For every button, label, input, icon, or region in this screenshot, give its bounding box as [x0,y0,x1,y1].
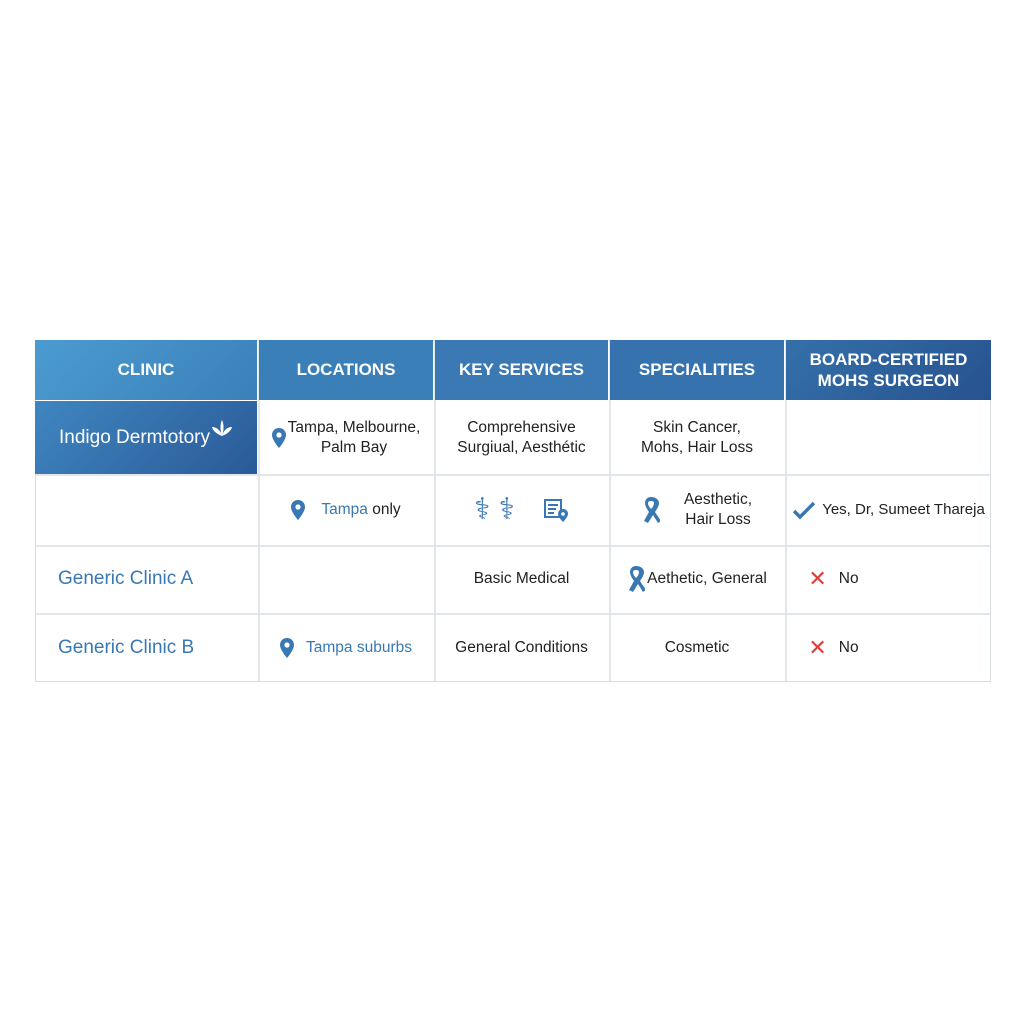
clinic name cell [35,401,257,474]
header: mohs [786,340,991,400]
row 3 [58,566,859,592]
locations [291,500,401,520]
specialities: Aesthetic, [684,490,752,508]
specialities: Skin Cancer, [653,418,741,436]
table grid [35,340,991,682]
mohs no: No [839,638,859,656]
header: locations [259,340,433,400]
header row [35,340,991,400]
locations: Tampa suburbs [306,638,412,656]
header: key services [435,340,608,400]
locations [272,418,420,456]
services: Surgiual, Aesthétic [457,438,586,456]
locations: only [372,500,401,518]
header: specialities: SPECIALITIES [639,360,755,379]
mohs no [808,566,859,591]
clinic A: Generic Clinic A [58,568,193,589]
services: Basic Medical [474,570,569,587]
locations: Palm Bay [321,438,387,456]
services: Comprehensive [467,418,576,436]
header: mohs: BOARD-CERTIFIED [810,350,967,369]
header: locations: LOCATIONS [297,360,395,379]
mohs no [808,634,859,660]
mohs no: ✕ [808,566,827,591]
header: key services: KEY SERVICES [459,360,584,379]
clinic name cell: Indigo Dermtotory [59,426,210,448]
locations: Tampa, Melbourne, [288,418,420,436]
row 2 [291,490,985,528]
mohs no: No [839,570,859,587]
clinic B: Generic Clinic B [58,636,194,658]
row: Indigo [35,401,753,474]
header: clinic: CLINIC [118,360,174,379]
service icons: ⚕︎ ⚕︎ [474,492,515,526]
services [457,418,586,456]
header: clinic [35,340,257,400]
specialities: Cosmetic [665,638,729,656]
locations: Tampa [321,500,368,518]
locations [280,638,412,658]
specialities: Mohs, Hair Loss [641,438,753,456]
mohs yes: Yes, Dr, Sumeet Thareja [822,500,985,518]
specialities: Aethetic, General [647,570,767,587]
mohs no: ✕ [808,634,827,660]
services: General Conditions [455,638,588,656]
service icons [474,492,568,526]
specialities: Hair Loss [685,510,751,528]
row 4 [58,634,859,660]
header: specialities [610,340,784,400]
specialities [629,566,767,592]
specialities [644,490,752,528]
specialities [641,418,753,456]
header: mohs: MOHS SURGEON [818,371,959,390]
